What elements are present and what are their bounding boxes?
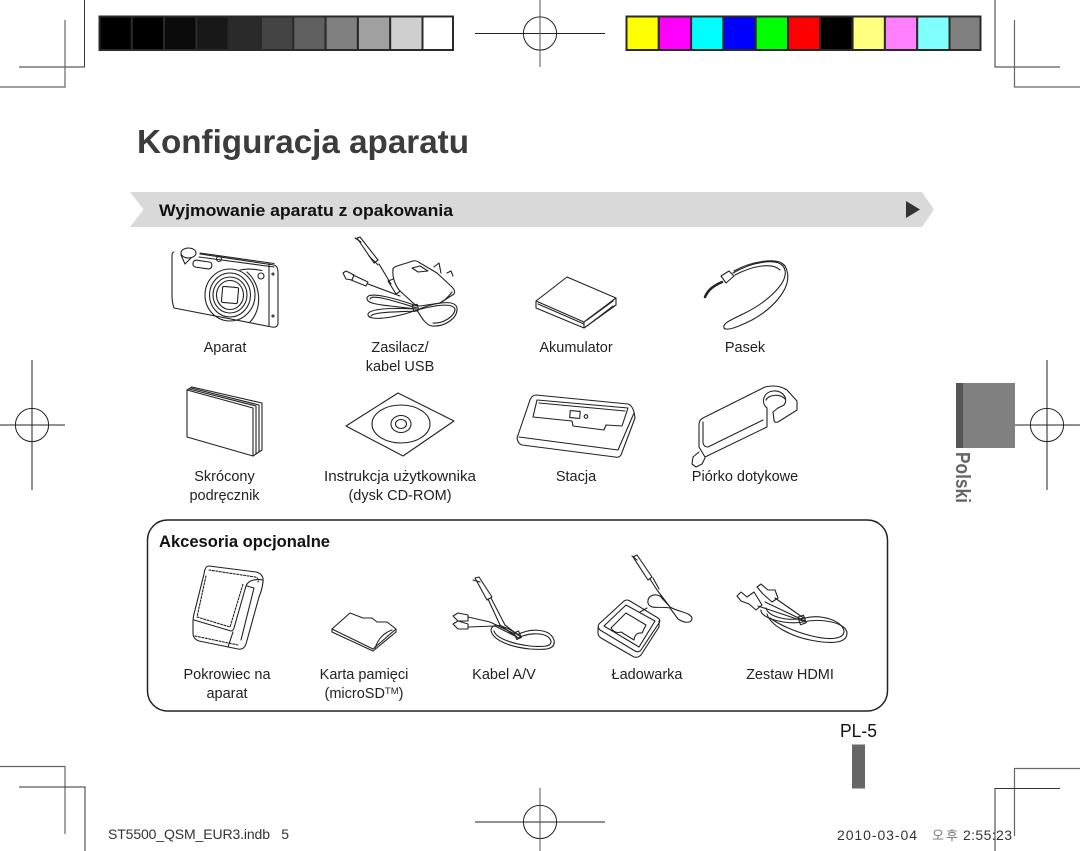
- icon: stylus: [692, 386, 797, 467]
- label: Skrócony podręcznik: Skrócony: [194, 469, 255, 485]
- footer: date and time: 오후: [932, 828, 958, 843]
- page number: PL-5: [840, 721, 877, 741]
- label: Pokrowiec na aparat: Pokrowiec na: [183, 667, 271, 683]
- label: Zasilacz / kabel USB: kabel USB: [366, 359, 434, 375]
- icon: microSD card: [332, 613, 396, 651]
- label: Ładowarka: Ładowarka: [612, 667, 683, 683]
- label: Akumulator: Akumulator: [539, 340, 613, 356]
- icon: HDMI cable: [737, 584, 847, 642]
- label: Stacja: Stacja: [556, 469, 597, 485]
- label: Instrukcja użytkownika (dysk CD-ROM): [324, 469, 477, 504]
- label: Kabel A/V: Kabel A/V: [472, 667, 536, 683]
- label: Zasilacz / kabel USB: [366, 340, 434, 375]
- registration mark: top: [475, 0, 605, 67]
- icon: A/V cable: [453, 577, 554, 649]
- label: Aparat: Aparat: [204, 340, 246, 356]
- language tab: [956, 383, 1015, 448]
- panel heading: Akcesoria opcjonalne: [159, 533, 330, 551]
- label: Karta pamięci (microSD TM): (microSD: [325, 686, 385, 702]
- label: Skrócony podręcznik: podręcznik: [189, 488, 260, 504]
- icon: CD-ROM: [346, 393, 454, 456]
- section banner: [130, 192, 934, 227]
- icon: battery charger: [598, 555, 692, 657]
- colour calibration strip: [626, 16, 980, 50]
- icon: battery: [536, 277, 616, 328]
- footer: date and time: 2010-03-04: [837, 827, 917, 843]
- icon: camera case: [193, 566, 263, 649]
- banner heading: Wyjmowanie aparatu z opakowania: [159, 202, 454, 220]
- registration mark: left: [0, 360, 65, 490]
- footer: file name: ST5500_QSM_EUR3.indb 5: [108, 826, 289, 842]
- icon: camera: [172, 248, 278, 327]
- icon: quick start booklet: [187, 387, 262, 456]
- icon: charger with USB cable: [343, 237, 457, 326]
- footer: date and time: [837, 827, 1012, 843]
- label: Pokrowiec na aparat: [183, 667, 271, 702]
- registration mark: bottom: [475, 788, 605, 851]
- page number bar: [852, 744, 865, 788]
- label: Karta pamięci (microSD TM): Karta pamięci: [320, 667, 408, 683]
- label: Instrukcja użytkownika (dysk CD-ROM): Instrukcja użytkownika: [324, 469, 477, 485]
- grayscale calibration strip: [100, 16, 453, 50]
- label: Karta pamięci (microSD TM): TM: [385, 686, 399, 697]
- label: Pokrowiec na aparat: aparat: [206, 686, 248, 702]
- label: Karta pamięci (microSD TM): ): [399, 686, 403, 702]
- label: Skrócony podręcznik: [189, 469, 260, 504]
- icon: wrist strap: [705, 261, 788, 329]
- label: Instrukcja użytkownika (dysk CD-ROM): (dysk CD-ROM): [348, 488, 452, 504]
- icon: next arrow: [906, 201, 920, 218]
- icon: dock station: [517, 395, 635, 457]
- registration mark: right: [1015, 360, 1080, 490]
- title: Konfiguracja aparatu: [137, 123, 469, 160]
- label: Zasilacz / kabel USB: Zasilacz/: [371, 340, 430, 356]
- footer: date and time: 2:55:23: [963, 827, 1012, 843]
- label: Zestaw HDMI: Zestaw HDMI: [746, 667, 834, 683]
- label: Karta pamięci (microSD TM): [320, 667, 408, 702]
- panel: optional accessories: [148, 520, 888, 711]
- language label: Polski: Polski: [951, 452, 973, 503]
- label: Piórko dotykowe: Piórko dotykowe: [692, 469, 798, 485]
- label: Pasek: Pasek: [725, 340, 766, 356]
